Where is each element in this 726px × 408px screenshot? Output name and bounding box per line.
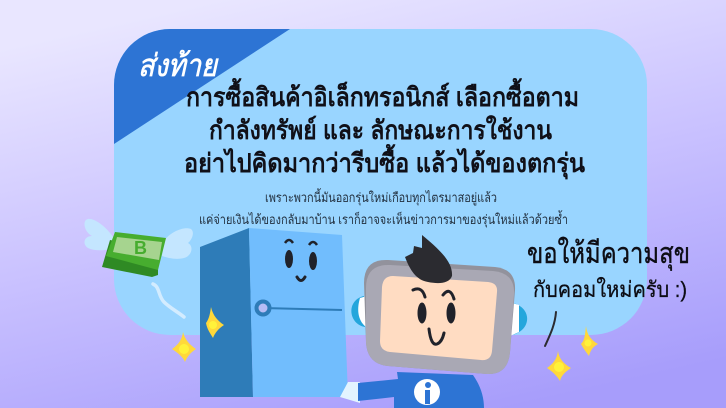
- main heading: อย่าไปคิดมากว่ารีบซื้อ แล้วได้ของตกรุ่น: [184, 143, 585, 180]
- icon: sparkle on fridge: [206, 307, 224, 338]
- face: [380, 276, 497, 360]
- panel: main light blue card: [114, 29, 647, 335]
- character: robot mascot: [340, 235, 527, 408]
- fridge handle: [256, 302, 342, 314]
- ears: [351, 296, 365, 327]
- ribbon heading: ส่งท้าย: [138, 48, 219, 83]
- supporting text: แค่จ่ายเงินได้ของกลับมาบ้าน เราก็อาจจะเห็นข่าวการมาของรุ่นใหม่แล้วด้วยซ้ำ: [199, 210, 568, 228]
- robot face features: [413, 289, 456, 344]
- icon: sparkle left: [172, 332, 196, 362]
- icon: sparkle right bottom: [547, 351, 571, 381]
- handwritten message: กับคอมใหม่ครับ :): [533, 277, 687, 302]
- body: [358, 372, 484, 408]
- handwritten message: [527, 236, 690, 302]
- main heading: การซื้อสินค้าอิเล็กทรอนิกส์ เลือกซื้อตาม: [186, 77, 579, 112]
- supporting text: เพราะพวกนี้มันออกรุ่นใหม่เกือบทุกไตรมาสอยู่แล้ว: [265, 188, 497, 206]
- logo on shirt: [414, 379, 440, 405]
- corner ribbon: dark blue triangle: [114, 29, 290, 144]
- fridge face: [285, 240, 317, 280]
- main heading: กำลังทรัพย์ และ ลักษณะการใช้งาน: [209, 115, 552, 145]
- head: [364, 260, 515, 374]
- speech tick: [545, 312, 556, 346]
- icon: sparkle right top: [581, 326, 598, 356]
- supporting text: [199, 188, 568, 228]
- icon: flying money: [85, 219, 193, 317]
- hair: [405, 235, 452, 283]
- handwritten message: ขอให้มีความสุข: [527, 236, 690, 271]
- main heading: [184, 77, 585, 180]
- icon: refrigerator: [200, 228, 348, 397]
- icon: flying money: B: [134, 238, 147, 258]
- hand holding fridge: [340, 382, 360, 403]
